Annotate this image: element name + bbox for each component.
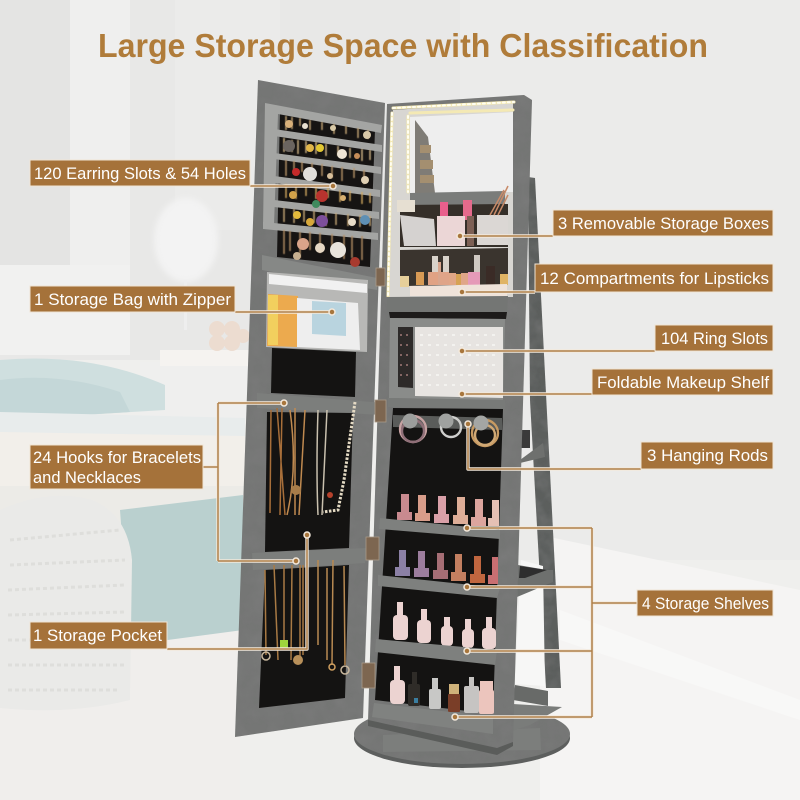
right cabinet body	[368, 95, 532, 755]
nail polish row 1	[397, 494, 499, 526]
label: storage pocket	[30, 622, 167, 649]
zipper storage bag	[266, 272, 368, 352]
hinges	[362, 268, 386, 688]
earring rack	[263, 103, 382, 267]
removable storage boxes	[397, 186, 508, 246]
leader lines and dots	[167, 183, 655, 720]
label: earring slots: 120 Earring Slots & 54 Holes	[34, 164, 246, 183]
label: storage boxes: 3 Removable Storage Boxes	[558, 214, 769, 233]
label: storage bag: 1 Storage Bag with Zipper	[34, 290, 231, 309]
hanging rods and bracelets	[393, 414, 502, 446]
lit mirror compartment	[387, 102, 514, 297]
label: hanging rods: 3 Hanging Rods	[647, 446, 768, 465]
jewelry cabinet	[235, 80, 570, 768]
LED strips	[388, 102, 514, 296]
back frame legs	[513, 177, 561, 706]
lipstick compartments	[400, 248, 508, 286]
label: makeup shelf: Foldable Makeup Shelf	[597, 373, 769, 392]
black back panel	[375, 408, 503, 714]
assorted bottles row 4	[390, 666, 494, 714]
door strip	[262, 255, 377, 290]
label: storage shelves: 4 Storage Shelves	[642, 594, 769, 613]
label: lipstick compartments	[535, 264, 773, 292]
shelf 1	[379, 518, 500, 539]
label: hanging rods	[641, 442, 773, 469]
lower bracelet hook bar	[252, 548, 367, 570]
shelf 4	[372, 703, 493, 734]
label: ring slots: 104 Ring Slots	[661, 329, 768, 348]
label: hooks: and Necklaces	[33, 468, 141, 487]
title: Large Storage Space with Classification	[98, 27, 708, 64]
label: storage pocket: 1 Storage Pocket	[33, 626, 162, 645]
label: ring slots	[655, 325, 773, 351]
label: hooks	[30, 445, 203, 489]
left door	[235, 80, 385, 737]
rotating round base	[354, 704, 570, 768]
upper bracelet hook bar	[257, 393, 385, 415]
serum bottles row 3	[393, 602, 496, 649]
storage pocket panel	[259, 560, 349, 708]
shelf 3	[375, 639, 497, 665]
nail polish row 2	[395, 550, 498, 584]
foldable makeup shelf with ring slots	[388, 318, 505, 409]
shelf 2	[378, 575, 500, 598]
label: storage shelves	[637, 590, 773, 616]
necklace panel	[265, 402, 355, 552]
label: hooks: 24 Hooks for Bracelets	[33, 448, 201, 467]
label: lipstick compartments: 12 Compartments for Lipsticks	[540, 269, 769, 288]
